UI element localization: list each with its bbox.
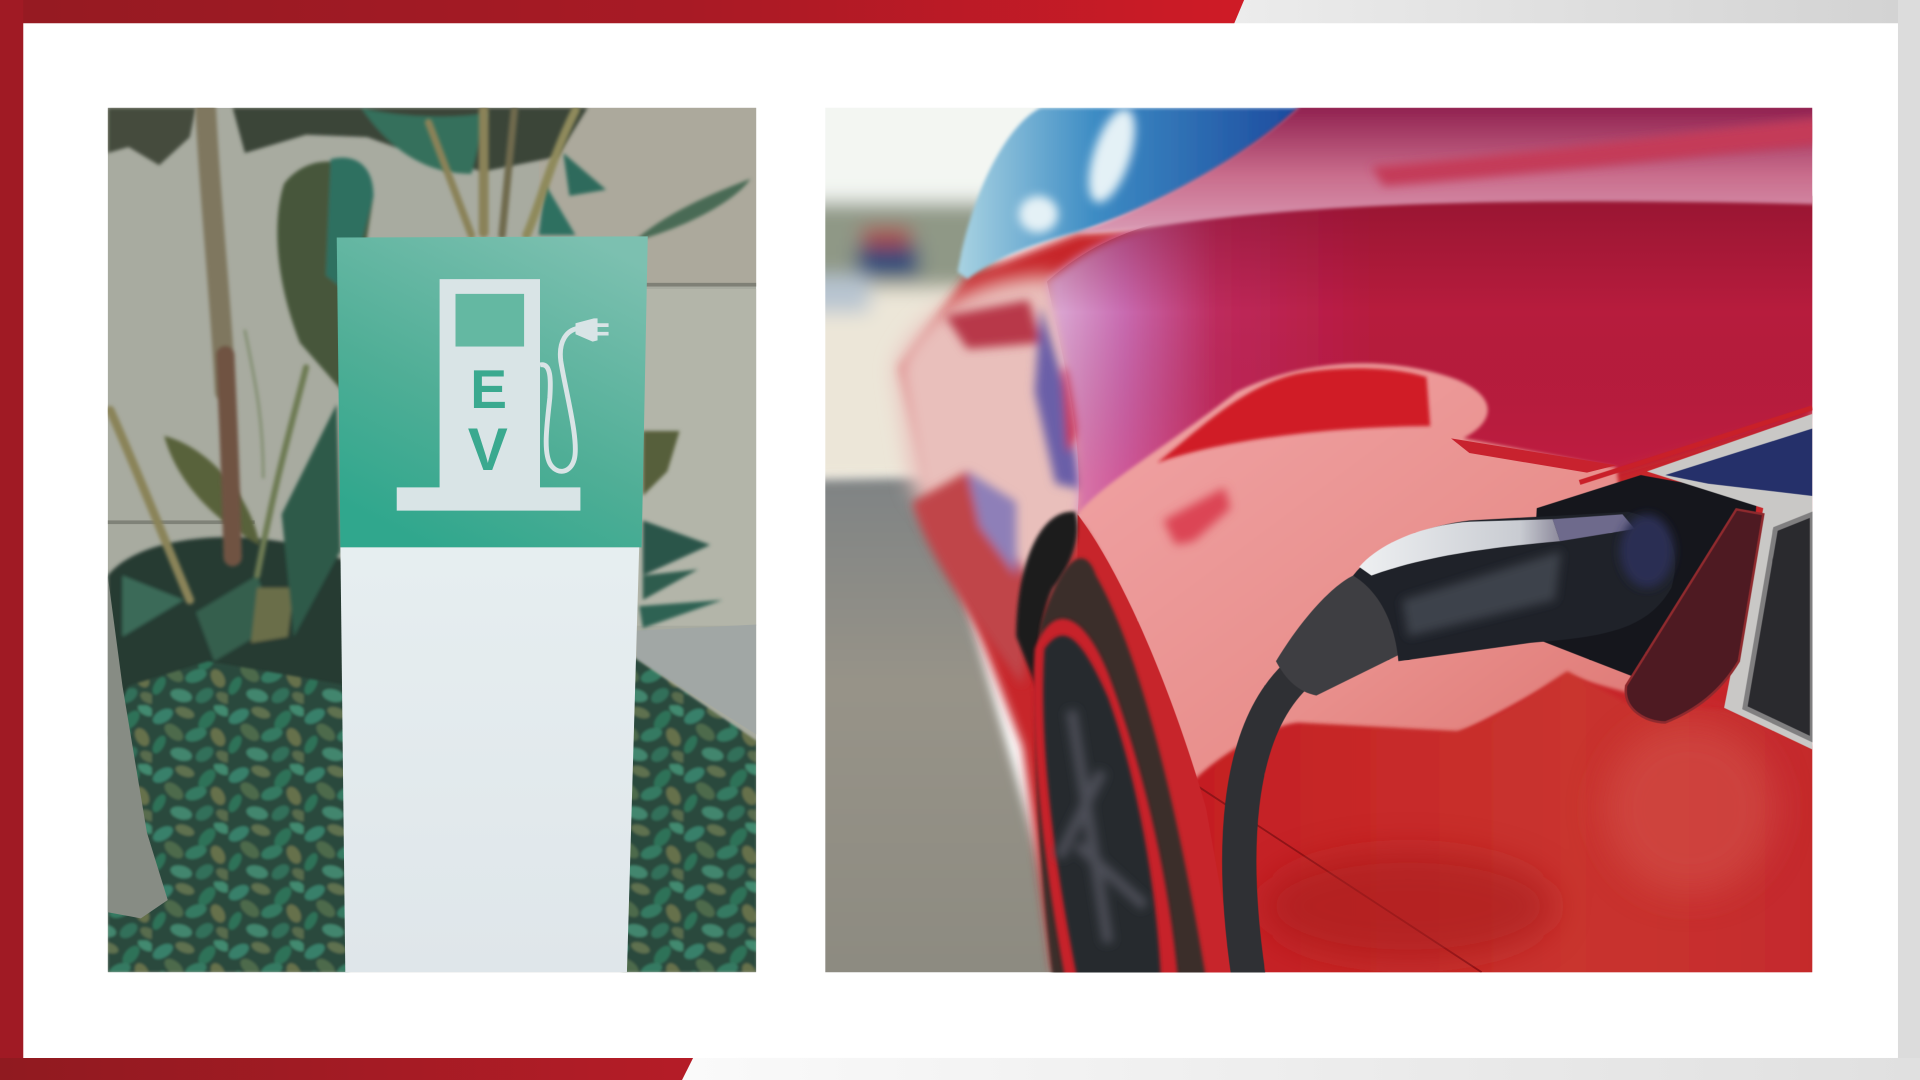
- wheel spokes: [1059, 710, 1145, 943]
- arch shadow: [1016, 512, 1077, 698]
- taillight housing: [1647, 414, 1812, 749]
- wheel rim: [1043, 636, 1161, 980]
- handle body: [1353, 512, 1675, 661]
- car body base: [900, 202, 1812, 972]
- cable: [1239, 676, 1296, 980]
- charge port cavity: [1531, 475, 1757, 680]
- right bushes: [622, 655, 757, 972]
- icon: EV charging pump: [397, 279, 609, 511]
- red rim lip: [1033, 619, 1178, 980]
- panel: red car charging photo: [796, 86, 1824, 992]
- frame: light bottom bar: [680, 1058, 1920, 1080]
- blurred background: [825, 108, 1039, 481]
- rubber neck: [1276, 576, 1398, 696]
- wheel: [1016, 512, 1206, 980]
- left bushes: [108, 661, 349, 972]
- port flap: [1626, 509, 1763, 722]
- foliage behind sign: [108, 108, 751, 735]
- silver top: [1359, 519, 1560, 576]
- charging cable: [540, 328, 582, 471]
- roof red streak: [1371, 118, 1824, 186]
- tree trunk: [108, 576, 168, 918]
- tire: [1036, 558, 1206, 980]
- frame: red top bar: [0, 0, 1244, 23]
- charging connector: [1239, 512, 1675, 980]
- frame: red left bar: [0, 0, 23, 1080]
- frame: grey top bar: [1231, 0, 1920, 23]
- plug: [576, 318, 609, 342]
- roof reflection band: [1078, 105, 1824, 233]
- window highlights: [1019, 103, 1144, 233]
- lower reflection patches: [1261, 722, 1776, 961]
- blue connector end: [1620, 514, 1674, 588]
- purple sheen: [1553, 514, 1635, 541]
- pump screen: [456, 294, 524, 347]
- handle side sheen: [1402, 551, 1561, 637]
- door panel: [1047, 196, 1824, 514]
- door seam highlight: [1451, 438, 1616, 473]
- plant stems: [110, 110, 576, 600]
- sign white post: [340, 547, 639, 972]
- lower body panel: [1190, 671, 1824, 980]
- letter E: E: [470, 358, 507, 420]
- panel: EV charging sign photo: [108, 108, 757, 972]
- red car reflection: [1157, 368, 1430, 463]
- car side window: [958, 108, 1300, 279]
- fender panel: [1078, 363, 1647, 790]
- letter V: V: [468, 416, 508, 483]
- frame: grey right bar: [1898, 0, 1920, 1080]
- frame: red bottom bar: [0, 1058, 693, 1080]
- lower body crease: [1194, 784, 1482, 972]
- pump body: [397, 279, 580, 511]
- red hood edge: [1580, 408, 1812, 482]
- blurred rear of car: [894, 276, 1102, 600]
- wall background: [108, 108, 757, 972]
- dark lens: [1745, 514, 1812, 740]
- wheel arch edge: [1078, 514, 1237, 980]
- small fender reflection: [1163, 487, 1231, 545]
- sign green header: [337, 236, 648, 547]
- rear reflections: [908, 294, 1082, 682]
- tail glass: [1665, 429, 1812, 496]
- pavement: [825, 472, 1054, 972]
